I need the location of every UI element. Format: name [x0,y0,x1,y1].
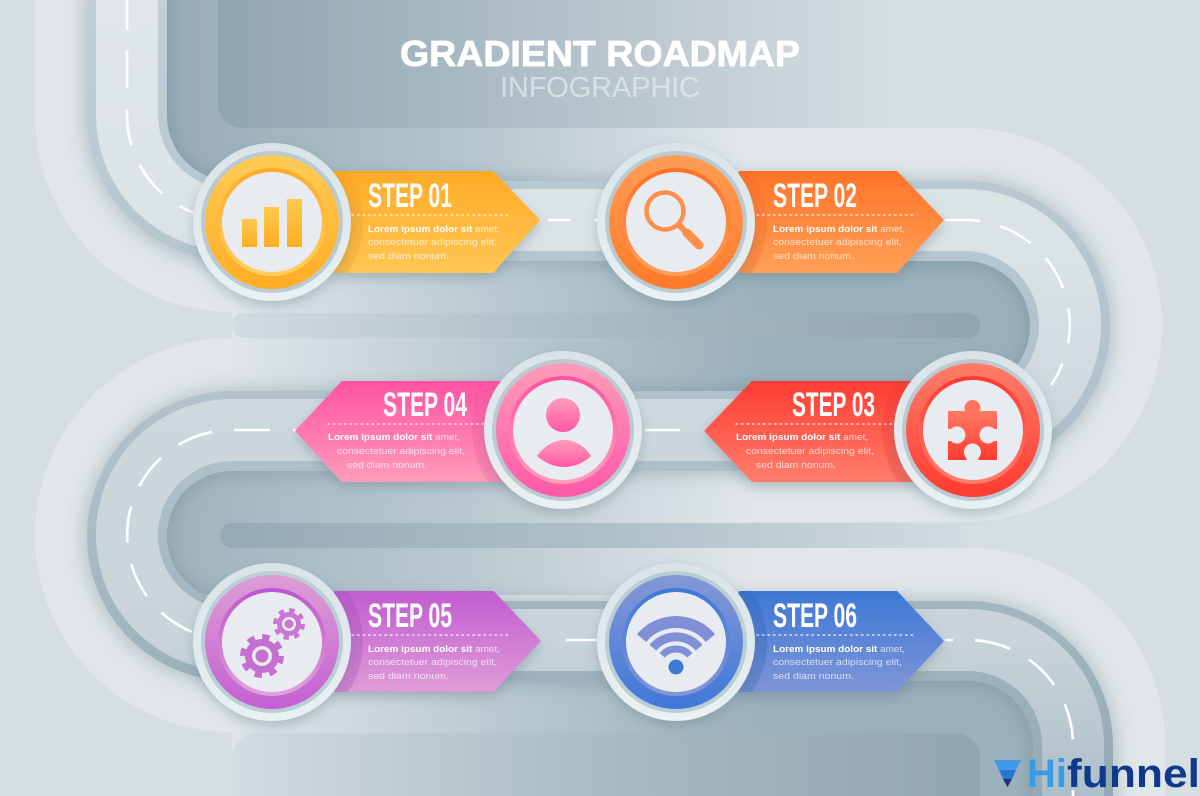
icon: gears [243,610,302,675]
step 06 banner [738,591,946,698]
step 06 badge [597,563,755,721]
step 06 banner: Lorem ipsum dolor sit amet, [773,644,905,655]
logo: Hifunnel: Hi [1027,752,1067,796]
road halo ribbon [127,0,1073,796]
step 01 banner: Lorem ipsum dolor sit amet, [368,224,500,235]
step 01 badge [193,143,351,301]
step 06 banner: sed diam nonum. [773,671,854,682]
step 04 banner: sed diam nonum. [347,460,427,471]
step 01 banner: STEP 01 [368,177,452,215]
step 04 banner [293,381,508,490]
icon: person [537,398,591,467]
step 01 [181,131,538,313]
step 03 badge [894,351,1052,509]
title: GRADIENT ROADMAP [400,33,800,74]
step 04 banner: Lorem ipsum dolor sit amet, [328,432,460,443]
step 03 [706,339,1064,521]
step 03 banner: Lorem ipsum dolor sit amet, [736,432,868,443]
step 04 [297,339,654,521]
step 02 banner: sed diam nonum. [773,251,854,262]
step 02 banner: consectetuer adipiscing elit, [773,237,902,248]
icon: puzzle piece [946,400,999,462]
icon: funnel triangle [994,760,1021,787]
step 03 banner: sed diam nonum. [756,460,836,471]
step 05 banner: Lorem ipsum dolor sit amet, [368,644,500,655]
step 02 banner: Lorem ipsum dolor sit amet, [773,224,905,235]
step 03 banner: STEP 03 [792,386,875,424]
shaded ribbon bands [167,0,1035,796]
step 05 badge [193,563,351,721]
step 04 banner: STEP 04 [383,386,467,424]
step 05 banner: STEP 05 [368,597,452,635]
step 05 banner: consectetuer adipiscing elit, [368,657,497,668]
panel: bottom recess [232,733,980,796]
step 05 banner [332,591,542,702]
panel: upper strip recess [232,313,980,338]
panel: lower strip recess [220,523,970,548]
logo: Hifunnel: funnel [1067,752,1200,796]
subtitle: INFOGRAPHIC [500,72,700,104]
step 02 badge [597,143,755,301]
step 03 banner [703,381,920,492]
step 03 banner: consectetuer adipiscing elit, [746,446,874,457]
road shadow [127,0,1073,796]
step 01 banner: consectetuer adipiscing elit, [368,237,497,248]
step 02 [592,146,946,308]
icon: wifi [642,622,710,674]
logo: Hifunnel [994,752,1200,796]
step 06 banner: STEP 06 [773,597,857,635]
step 01 banner: sed diam nonum. [368,251,449,262]
panel: top recess [218,0,1200,128]
step 04 banner: consectetuer adipiscing elit, [337,446,465,457]
title [400,33,800,104]
step 05 [181,551,539,733]
step 06 banner: consectetuer adipiscing elit, [773,657,902,668]
step 05 banner: sed diam nonum. [368,671,449,682]
step 04 badge [484,351,642,509]
icon: magnifier [646,192,699,245]
step 06 [591,566,946,728]
step 01 banner [332,171,542,283]
step 02 banner [738,171,946,280]
road centre dashes [127,0,1073,796]
icon: bar chart [242,199,302,247]
road [127,0,1073,796]
step 02 banner: STEP 02 [773,177,857,215]
